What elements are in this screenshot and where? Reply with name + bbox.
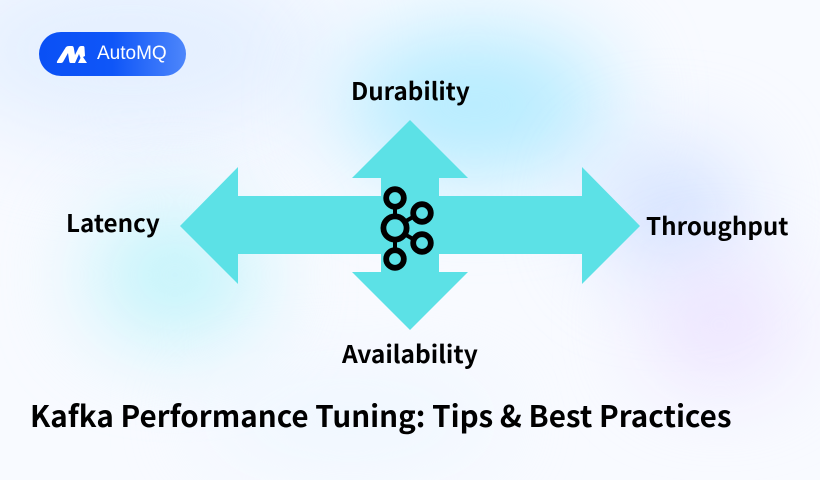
icon: AutoMQ mark: [56, 46, 87, 63]
label: Latency: Latency: [66, 204, 160, 239]
arrows: horizontal and vertical: [180, 120, 640, 330]
title: Kafka Performance Tuning: Tips & Best Practices: [30, 393, 732, 436]
label: Durability: Durability: [351, 72, 470, 107]
label: Availability: Availability: [342, 336, 478, 371]
icon: Kafka logo: [383, 189, 431, 268]
label: Throughput: Throughput: [646, 207, 788, 242]
logo badge: AutoMQ: [39, 32, 186, 76]
logo wordmark: AutoMQ: [97, 43, 167, 64]
